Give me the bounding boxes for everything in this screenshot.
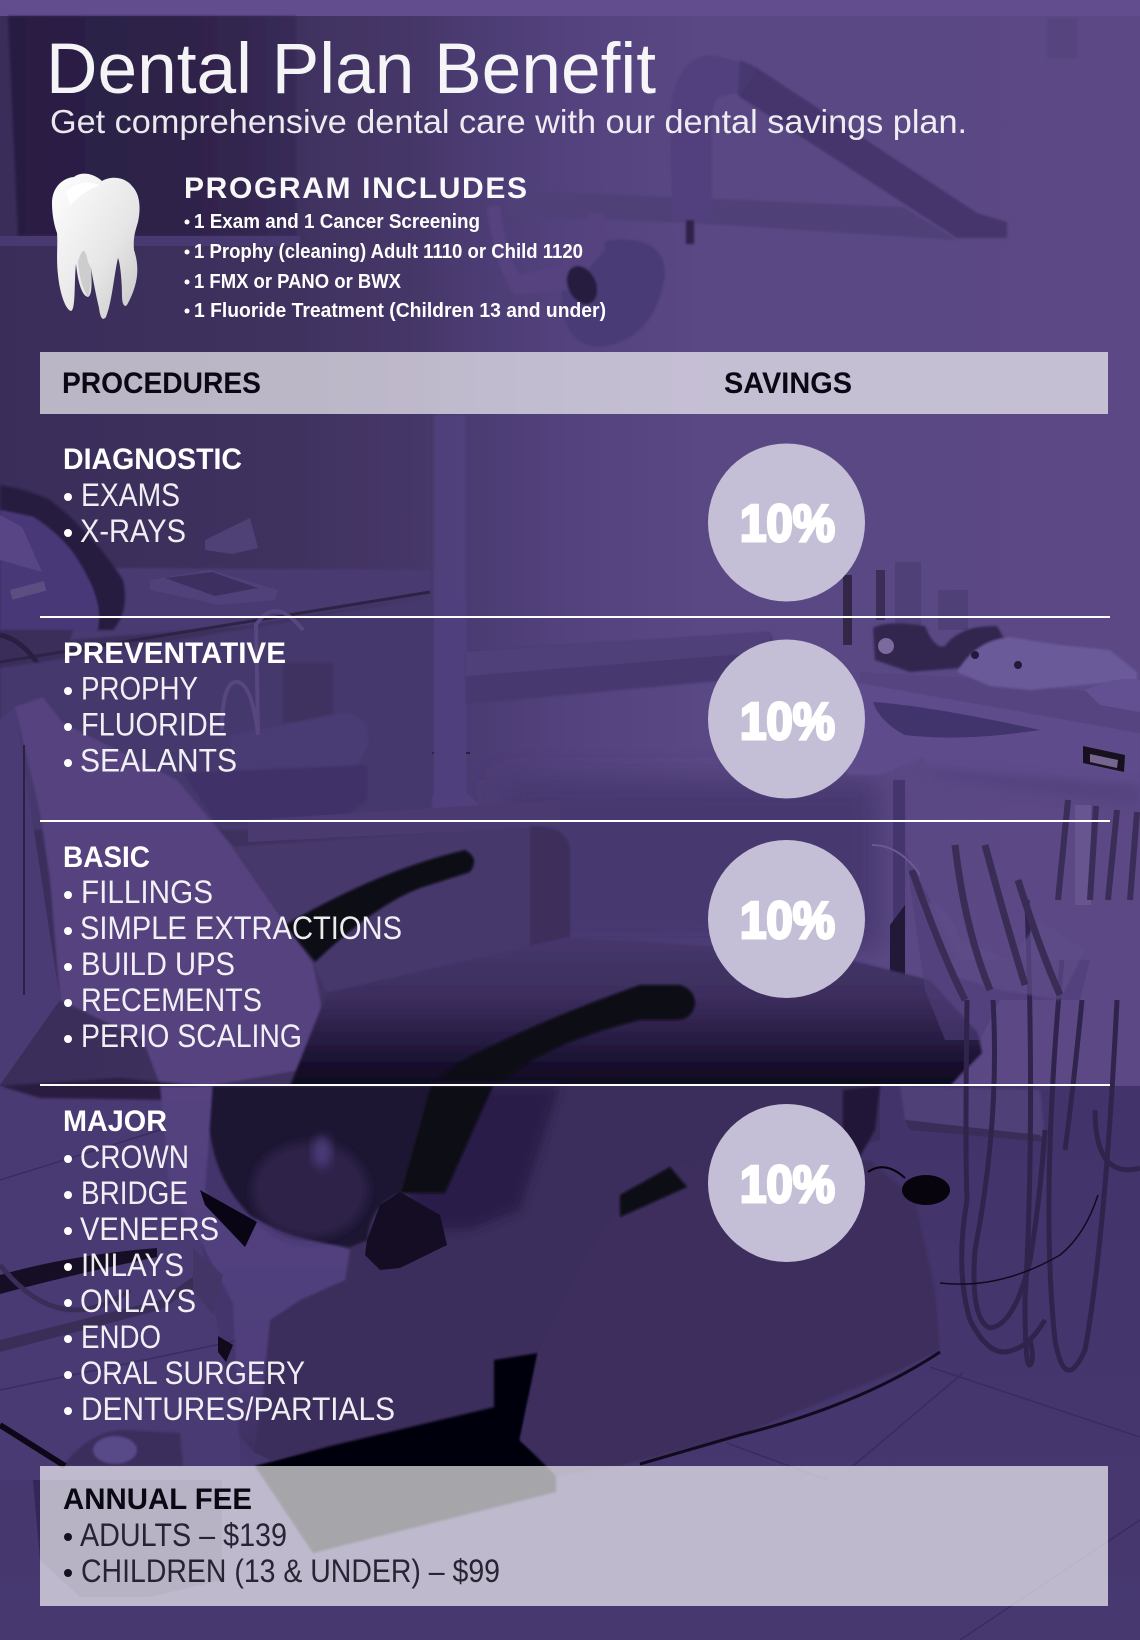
- program item 3: 1 FMX or PANO or BWX: [194, 271, 402, 293]
- icon: tooth: [52, 174, 140, 319]
- major heading: MAJOR: [63, 1105, 167, 1138]
- table header panel: [40, 352, 1108, 414]
- annual fee heading: ANNUAL FEE: [63, 1483, 252, 1516]
- major list: ORAL SURGERY: [80, 1355, 305, 1391]
- program includes block: [184, 172, 606, 322]
- preventative list: SEALANTS: [80, 742, 237, 778]
- major list: ONLAYS: [80, 1283, 196, 1319]
- preventative list: PROPHY: [81, 670, 198, 706]
- row: basic: [63, 840, 865, 1054]
- horizontal arm: [466, 632, 790, 704]
- major savings badge: [708, 1104, 865, 1262]
- basic list: PERIO SCALING: [81, 1018, 302, 1054]
- floor: [0, 1086, 1140, 1640]
- basic list: [64, 874, 402, 1054]
- basic savings badge: [708, 840, 865, 998]
- preventative heading: PREVENTATIVE: [63, 637, 286, 670]
- basic list: FILLINGS: [81, 874, 213, 910]
- annual fee list: ADULTS – $139: [80, 1517, 287, 1553]
- preventative list: [64, 670, 237, 778]
- subtitle: Get comprehensive dental care with our dental savings plan.: [50, 103, 967, 140]
- pole: [434, 415, 466, 800]
- program item 2: 1 Prophy (cleaning) Adult 1110 or Child 1120: [194, 241, 583, 263]
- program item 1: 1 Exam and 1 Cancer Screening: [194, 211, 480, 233]
- lower wall and basin: [0, 598, 432, 830]
- major list: ENDO: [81, 1319, 161, 1355]
- lamp arm: [487, 55, 1007, 347]
- program item 4: 1 Fluoride Treatment (Children 13 and under): [194, 300, 606, 322]
- row: diagnostic: [63, 443, 865, 602]
- annual fee list: CHILDREN (13 & UNDER) – $99: [81, 1553, 500, 1589]
- major list: VENEERS: [80, 1211, 219, 1247]
- diagnostic list: X-RAYS: [80, 513, 186, 549]
- major savings badge: 10%: [740, 1156, 835, 1214]
- major list: DENTURES/PARTIALS: [81, 1391, 395, 1427]
- preventative savings badge: 10%: [740, 693, 835, 751]
- diagnostic savings badge: 10%: [740, 495, 835, 553]
- annual fee list: [64, 1517, 500, 1589]
- basic list: SIMPLE EXTRACTIONS: [80, 910, 402, 946]
- chair back: [0, 707, 60, 1085]
- chair base: [254, 1086, 880, 1460]
- diagnostic list: [64, 477, 186, 549]
- procedures heading: PROCEDURES: [62, 367, 261, 400]
- diagnostic list: EXAMS: [81, 477, 180, 513]
- basic heading: BASIC: [63, 841, 150, 874]
- basic savings badge: 10%: [740, 892, 835, 950]
- preventative list: FLUORIDE: [81, 706, 227, 742]
- major list: BRIDGE: [81, 1175, 188, 1211]
- preventative savings badge: [708, 640, 865, 798]
- title: Dental Plan Benefit: [46, 30, 656, 109]
- row: preventative: [63, 637, 865, 798]
- hoses and handpieces: [962, 900, 1140, 1370]
- savings heading: SAVINGS: [724, 367, 852, 400]
- row: major: [63, 1104, 865, 1427]
- diagnostic heading: DIAGNOSTIC: [63, 443, 242, 476]
- table and lamp on left: [70, 568, 430, 640]
- major list: [64, 1139, 395, 1427]
- basic list: RECEMENTS: [81, 982, 262, 1018]
- instrument tray: [895, 562, 921, 626]
- seat: [290, 937, 982, 1086]
- major list: INLAYS: [81, 1247, 184, 1283]
- basic list: BUILD UPS: [81, 946, 235, 982]
- diagnostic savings badge: [708, 444, 865, 602]
- program includes heading: PROGRAM INCLUDES: [184, 172, 527, 205]
- annual fee panel: [40, 1466, 1108, 1606]
- major list: CROWN: [80, 1139, 189, 1175]
